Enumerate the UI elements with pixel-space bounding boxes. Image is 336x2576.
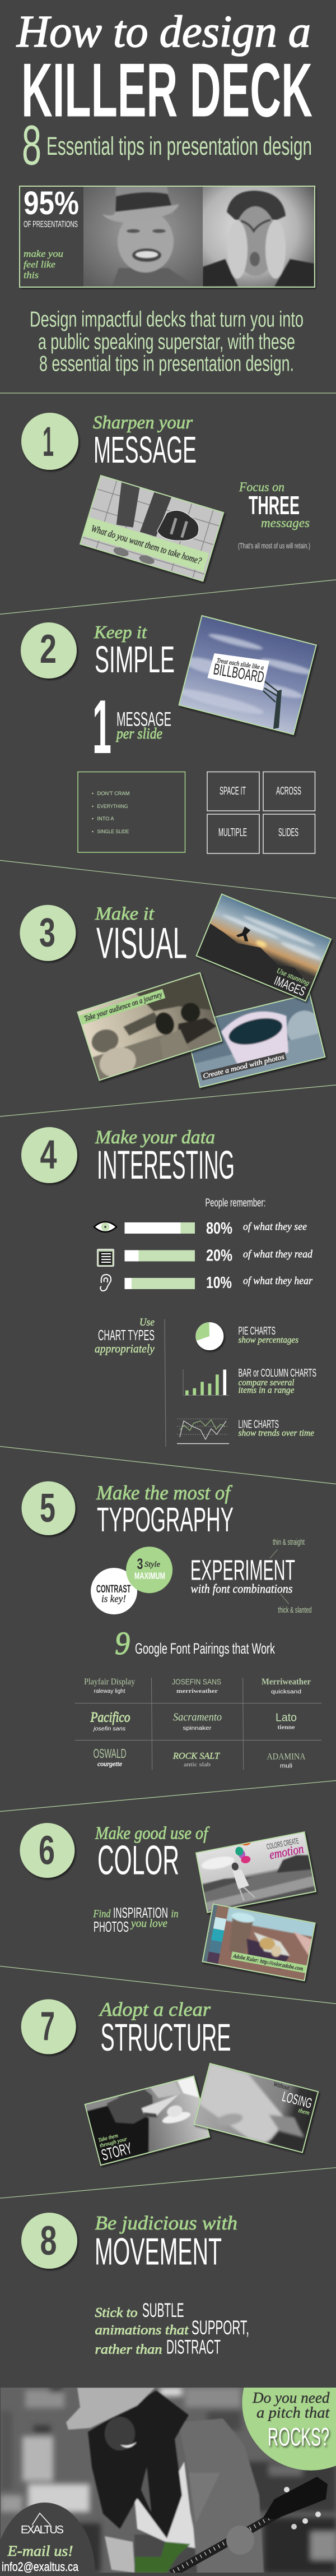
heading 1: MESSAGE xyxy=(94,429,197,471)
font pairings table: ADAMINA xyxy=(267,1752,306,1762)
stat row: see 80%: of what they see xyxy=(243,1221,307,1232)
stat row: hear 10%: 10% xyxy=(206,1274,232,1292)
slide text: STORY xyxy=(100,2139,134,2164)
heading 6: Make good use of xyxy=(95,1822,210,1843)
number badge 8 xyxy=(21,2213,77,2269)
number badge 4: 4 xyxy=(40,1133,57,1178)
heading 8: MOVEMENT xyxy=(95,2231,222,2273)
four spaced-out slides: ACROSS xyxy=(276,785,301,797)
font pairings table: Sacramento xyxy=(173,1711,222,1724)
slide caption: Use stunning xyxy=(276,966,311,987)
font pairings table: antic slab xyxy=(184,1761,211,1768)
font pairings table: josefin sans xyxy=(92,1725,126,1732)
slide text: emotion xyxy=(268,1841,305,1862)
circle: 3 style maximum: Style xyxy=(144,1561,160,1569)
photo: guitarist in a hat xyxy=(0,2386,336,2574)
font pairings table: Pacifico xyxy=(90,1710,130,1725)
section 5: typography xyxy=(21,1481,321,1770)
icon: line chart xyxy=(177,1419,229,1443)
heading 3: VISUAL xyxy=(96,918,187,968)
logo: Exaltus: EXALTUS xyxy=(21,2524,64,2536)
number badge 7 xyxy=(21,1999,76,2054)
crammed slide example: DON'T CRAM xyxy=(97,791,130,797)
inspiration note: PHOTOS xyxy=(94,1918,129,1935)
title script line: How to design a xyxy=(16,7,311,57)
font pairings table: Merriweather xyxy=(262,1677,311,1687)
section 4: make your data interesting xyxy=(21,1127,316,1447)
stat row: read 20% xyxy=(97,1247,312,1266)
heading 5 xyxy=(96,1481,234,1539)
heading 5: TYPOGRAPHY xyxy=(97,1501,234,1539)
section 2: keep it simple xyxy=(21,615,321,853)
pie chart example xyxy=(195,1322,298,1350)
heading 7: STRUCTURE xyxy=(101,2016,231,2059)
icon: document list xyxy=(97,1249,114,1266)
inspiration note: Find xyxy=(93,1908,111,1920)
icon: bar chart xyxy=(183,1369,230,1395)
font pairings heading: 9 xyxy=(115,1625,130,1661)
font pairings table: quicksand xyxy=(271,1688,301,1695)
photo: man squeezing his face xyxy=(203,187,314,287)
chart types callout: Use xyxy=(139,1317,155,1328)
inspiration note: in xyxy=(171,1908,178,1920)
experiment callout: thick & slanted xyxy=(278,1606,311,1615)
heading 3 xyxy=(95,904,187,968)
number badge 2: 2 xyxy=(40,627,57,672)
number badge 6 xyxy=(20,1823,74,1878)
hero border xyxy=(20,186,315,287)
billboard sign: BILLBOARD xyxy=(212,660,265,686)
stat row: see 80%: 80% xyxy=(206,1220,232,1238)
line chart example: show trends over time xyxy=(239,1429,314,1438)
slide text: through your xyxy=(99,2136,128,2149)
heading 2: SIMPLE xyxy=(95,639,175,681)
slide text: LOSING xyxy=(281,2089,314,2112)
heading 5: Make the most of xyxy=(96,1481,233,1504)
section 6: make good use of color xyxy=(20,1822,316,1981)
stat row: read 20%: 20% xyxy=(206,1247,232,1265)
slide caption: IMAGES xyxy=(272,973,308,999)
movement advice: SUPPORT, xyxy=(192,2317,249,2339)
stat label: OF PRESENTATIONS xyxy=(24,220,78,229)
four spaced-out slides: SPACE IT xyxy=(220,785,246,797)
inspiration note: you love xyxy=(130,1918,167,1930)
inspiration note: INSPIRATION xyxy=(113,1904,168,1921)
icon: pie chart xyxy=(195,1322,223,1350)
line chart example: LINE CHARTS xyxy=(239,1419,279,1431)
crammed slide example: INTO A xyxy=(97,816,114,822)
heading 7 xyxy=(99,1998,231,2059)
heading 6 xyxy=(95,1822,210,1883)
email address: info2@exaltus.ca xyxy=(2,2560,79,2574)
number badge 3: 3 xyxy=(39,911,55,955)
section 3: make it visual xyxy=(20,894,331,1088)
stat row: read 20%: of what they read xyxy=(243,1248,312,1261)
heading 2: Keep it xyxy=(94,622,147,642)
slide caption band xyxy=(83,517,209,572)
side note: focus on three xyxy=(238,480,310,550)
slide caption band: Take your audience on a journey xyxy=(83,990,163,1023)
slide caption band xyxy=(79,989,165,1025)
section 8: be judicious with movement xyxy=(21,2212,249,2358)
crammed slide example: SINGLE SLIDE xyxy=(97,829,129,835)
pie chart example: PIE CHARTS xyxy=(239,1325,276,1337)
email prompt: E-mail us! xyxy=(7,2543,73,2559)
billboard sign: Treat each slide like a xyxy=(216,657,264,671)
font pairings table: merriweather xyxy=(176,1688,218,1695)
heading 6: COLOR xyxy=(97,1838,179,1883)
font pairings table: muli xyxy=(280,1763,292,1770)
font pairings heading xyxy=(115,1625,275,1661)
photo: grimacing man in hat xyxy=(83,187,203,287)
one message per slide: per slide xyxy=(115,725,162,742)
heading 8 xyxy=(95,2212,237,2273)
slide: take home message xyxy=(80,473,225,581)
circle: 3 style maximum xyxy=(126,1546,172,1593)
icon: eye xyxy=(94,1222,116,1232)
heading 4 xyxy=(95,1127,235,1188)
slide: take your audience on a journey xyxy=(77,973,223,1083)
bar chart example xyxy=(183,1367,316,1395)
number badge 7: 7 xyxy=(40,2004,55,2049)
title block xyxy=(16,7,312,177)
crammed slide example xyxy=(78,772,185,852)
callout: pitch that rocks: a pitch that xyxy=(256,2404,330,2421)
number badge 6: 6 xyxy=(39,1828,55,1873)
number badge 1: 1 xyxy=(43,418,54,465)
slide: create a mood xyxy=(185,992,330,1088)
bar chart example: items in a range xyxy=(239,1386,295,1395)
circle: contrast is key: CONTRAST xyxy=(96,1583,131,1595)
four spaced-out slides: MULTIPLE xyxy=(218,827,247,839)
slide text: them xyxy=(298,2108,310,2116)
heading 8: Be judicious with xyxy=(95,2212,237,2234)
slide: adobe kuler palette xyxy=(202,1904,315,1981)
pie chart example: show percentages xyxy=(239,1336,298,1345)
slide: take them through your story xyxy=(84,2073,209,2165)
hero panel: 95% of presentations xyxy=(20,185,315,287)
four spaced-out slides: SLIDES xyxy=(278,827,298,839)
logo: Exaltus xyxy=(21,2512,64,2533)
movement advice: rather than xyxy=(95,2343,162,2357)
number badge 4 xyxy=(21,1127,77,1183)
stat row: hear 10% xyxy=(100,1274,313,1292)
contact panel xyxy=(0,2503,95,2576)
section 1: sharpen your message xyxy=(21,413,310,581)
chart types callout xyxy=(95,1317,155,1355)
heading 7: Adopt a clear xyxy=(99,1998,211,2020)
bar chart example: compare several xyxy=(239,1378,295,1387)
font pairings table: JOSEFIN SANS xyxy=(172,1677,221,1686)
font pairings table xyxy=(75,1677,321,1770)
slide text xyxy=(274,2081,312,2115)
font pairings table: raleway light xyxy=(94,1688,125,1695)
intro paragraph xyxy=(30,307,304,376)
font pairings table: courgette xyxy=(97,1761,122,1767)
one message per slide: 1 xyxy=(92,684,111,769)
slide text: Take them xyxy=(98,2133,119,2144)
inspiration note xyxy=(93,1904,178,1935)
one message per slide: MESSAGE xyxy=(116,709,171,730)
line chart example xyxy=(177,1419,314,1443)
chart types callout: appropriately xyxy=(95,1342,155,1355)
slide caption xyxy=(274,968,309,996)
font pairings table: Playfair Display xyxy=(84,1677,135,1687)
slide: use stunning images xyxy=(197,894,331,1001)
stat caption: make you xyxy=(24,248,63,259)
icon: ear xyxy=(100,1275,111,1291)
movement advice: DISTRACT xyxy=(166,2336,221,2358)
billboard post xyxy=(263,680,279,702)
footer photo and calls to action xyxy=(1,2388,336,2573)
heading 2 xyxy=(94,622,175,681)
one message per slide xyxy=(92,684,171,769)
experiment callout: thin & straight xyxy=(273,1538,305,1547)
heading 1: Sharpen your xyxy=(93,413,193,433)
number badge 3 xyxy=(20,905,76,961)
stat row: see 80% xyxy=(94,1220,307,1238)
four spaced-out slides xyxy=(207,772,315,853)
font pairings table: OSWALD xyxy=(93,1746,127,1761)
stat row: hear 10%: of what they hear xyxy=(243,1275,313,1287)
side note: focus on three: THREE xyxy=(249,491,300,520)
billboard sign xyxy=(207,653,269,691)
font pairings table: tienne xyxy=(278,1724,295,1730)
movement advice: Stick to xyxy=(95,2306,138,2320)
number badge 1 xyxy=(21,413,78,470)
number badge 8: 8 xyxy=(40,2218,57,2264)
slide text xyxy=(267,1838,304,1859)
font pairings table: spinnaker xyxy=(183,1725,212,1732)
side note: focus on three: Focus on xyxy=(239,480,284,494)
font pairings table: Lato xyxy=(276,1711,297,1724)
circle: contrast is key xyxy=(91,1568,137,1614)
heading 4: Make your data xyxy=(95,1127,215,1148)
movement advice: animations that xyxy=(95,2323,189,2338)
slide text: Without xyxy=(273,2081,291,2092)
movement advice xyxy=(95,2300,249,2358)
slide caption band: Adobe Kuler: http://color.adobe.com xyxy=(232,1953,304,1972)
colour swatches xyxy=(202,1904,228,1965)
heading 1 xyxy=(93,413,197,471)
stat caption: feel like xyxy=(24,259,55,270)
stat caption: this xyxy=(24,270,39,280)
retention stats heading: People remember: xyxy=(205,1197,265,1209)
font pairings table: ROCK SALT xyxy=(172,1752,220,1761)
circle: contrast is key: is key! xyxy=(101,1593,126,1604)
slide: billboard xyxy=(174,615,321,736)
side note: focus on three: messages xyxy=(261,516,310,530)
slide caption: Create a mood with photos xyxy=(202,1052,285,1080)
movement advice: SUBTLE xyxy=(142,2300,184,2321)
circle: 3 style maximum: MAXIMUM xyxy=(134,1571,165,1581)
slide: without losing them xyxy=(194,2063,319,2153)
number badge 5 xyxy=(21,1481,75,1535)
callout: pitch that rocks xyxy=(242,2388,336,2471)
subtitle numeral: 8 xyxy=(22,114,41,177)
slide text: COLORS CREATE xyxy=(266,1836,300,1851)
experiment callout xyxy=(190,1538,311,1615)
hero frame and shadow xyxy=(20,186,315,287)
number badge 2 xyxy=(21,622,77,678)
crammed slide example: EVERYTHING xyxy=(97,804,128,810)
heading 3: Make it xyxy=(95,904,155,924)
experiment callout: with font combinations xyxy=(190,1581,292,1596)
stat: 95%: 95% xyxy=(24,185,79,221)
number badge 5: 5 xyxy=(40,1486,55,1531)
chart types callout: CHART TYPES xyxy=(98,1327,155,1344)
slide caption band: What do you want them to take home? xyxy=(90,523,203,566)
stat caption xyxy=(24,248,63,280)
section 7: adopt a clear structure xyxy=(21,1998,319,2165)
circle: 3 style maximum: 3 xyxy=(137,1555,143,1572)
slide text xyxy=(98,2134,130,2160)
slide: colors create emotion xyxy=(195,1827,316,1912)
callout: pitch that rocks: Do you need xyxy=(252,2389,330,2406)
